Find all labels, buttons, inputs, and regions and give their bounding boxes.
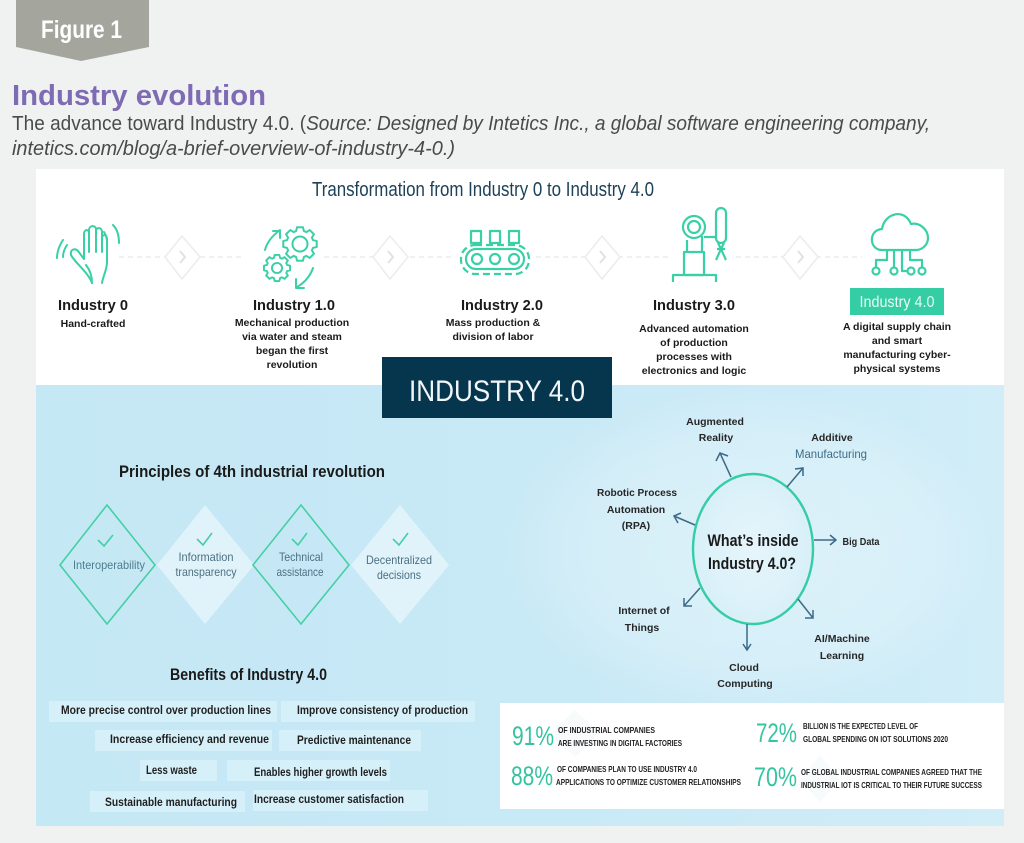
stat: 88%: APPLICATIONS TO OPTIMIZE CUSTOMER RELATIONSHIPS [556, 777, 741, 787]
figure tab [16, 0, 149, 61]
diamond: Technical assistance: assistance [276, 565, 324, 579]
banner: Industry 4.0 [382, 357, 612, 418]
diagram labels: (RPA) [622, 520, 650, 532]
timeline heading: Transformation from Industry 0 to Industry 4.0 [312, 179, 654, 201]
icon: gears [264, 227, 317, 288]
stage: Industry 2.0: Mass production & [446, 317, 541, 329]
stage: Industry 0: Hand-crafted [61, 318, 125, 330]
diamond: Information transparency: transparency [176, 565, 236, 579]
diagram labels: Things [625, 622, 659, 634]
benefits list: Less waste [146, 765, 197, 777]
stage: Industry 3.0: processes with [656, 351, 732, 363]
benefits list: Increase customer satisfaction [254, 794, 404, 806]
panel: Industry 4.0 details [36, 385, 1004, 826]
figure tab: Figure 1 [41, 16, 122, 44]
stat: 91%: OF INDUSTRIAL COMPANIES [558, 725, 655, 735]
heading: principles: Principles of 4th industrial revolution [119, 462, 385, 481]
diagram labels: Robotic Process [597, 487, 677, 499]
diamond: Interoperability [60, 505, 155, 624]
panel: transformation timeline [36, 169, 1004, 385]
benefits list: More precise control over production lines [61, 705, 271, 717]
diagram labels: Manufacturing [795, 447, 867, 461]
diagram labels: Automation [607, 504, 665, 516]
arrows [674, 453, 836, 650]
stat: 70%: 70% [754, 762, 797, 792]
stat: 91% [512, 721, 682, 751]
diamond: Information transparency: Information [178, 550, 234, 564]
stage: Industry 1.0: Industry 1.0 [253, 297, 335, 314]
caption [12, 113, 930, 160]
diagram labels: Reality [699, 432, 733, 444]
diamond: Technical assistance: Technical [279, 550, 323, 564]
stage: Industry 3.0: Industry 3.0 [653, 297, 735, 314]
diagram labels: Additive [811, 432, 853, 444]
benefits list: Enables higher growth levels [254, 767, 387, 779]
stage: Industry 3.0: electronics and logic [642, 365, 746, 377]
stage: Industry 1.0: began the first [256, 345, 329, 357]
banner: Industry 4.0: INDUSTRY 4.0 [409, 375, 585, 408]
diamond: Decentralized decisions [351, 505, 449, 624]
stat: 88% [511, 761, 741, 791]
caption: The advance toward Industry 4.0. (Source: Designed by Intetics Inc., a global software engineering company, [12, 113, 930, 135]
stat: 72%: 72% [756, 718, 797, 748]
diagram labels [597, 416, 880, 690]
stage: Industry 3.0 [639, 297, 749, 377]
stage: Industry 4.0: Industry 4.0 [860, 294, 935, 311]
benefits list: Predictive maintenance [297, 735, 411, 747]
benefits list [49, 701, 475, 812]
stage: Industry 2.0 [446, 297, 543, 343]
icon: conveyor [461, 231, 529, 274]
benefits list: Increase efficiency and revenue [110, 734, 269, 746]
stat: 72%: BILLION IS THE EXPECTED LEVEL OF [803, 721, 918, 731]
stage: Industry 2.0: Industry 2.0 [461, 297, 543, 314]
stat: 72%: GLOBAL SPENDING ON IOT SOLUTIONS 2020 [803, 734, 948, 744]
icon: hand [57, 225, 119, 283]
benefits list: Improve consistency of production [297, 705, 468, 717]
diamond: Technical assistance [253, 505, 349, 624]
stage: Industry 2.0: division of labor [452, 331, 534, 343]
diagram: what's inside Industry 4.0 [597, 416, 880, 690]
diagram labels: Cloud [729, 662, 759, 674]
timeline connectors [119, 236, 862, 279]
central circle [693, 474, 813, 624]
stage: Industry 4.0: A digital supply chain [843, 321, 951, 333]
stage: Industry 4.0 [843, 288, 951, 375]
stage: Industry 1.0: via water and steam [242, 331, 342, 343]
stat: 88%: OF COMPANIES PLAN TO USE INDUSTRY 4.0 [557, 764, 697, 774]
stat: 72% [756, 718, 948, 748]
stat: 70% [754, 762, 982, 792]
title: Industry evolution [12, 80, 266, 112]
benefits list: Sustainable manufacturing [105, 797, 237, 809]
stage: Industry 1.0: Mechanical production [235, 317, 349, 329]
diamond: Decentralized decisions: decisions [377, 568, 421, 582]
heading: benefits: Benefits of Industry 4.0 [170, 665, 327, 684]
icon: robot arm [673, 208, 726, 282]
stat: 91%: 91% [512, 721, 554, 751]
diagram labels: Big Data [842, 536, 880, 548]
caption: intetics.com/blog/a-brief-overview-of-industry-4-0.) [12, 138, 455, 160]
central circle: Industry 4.0? [708, 554, 796, 573]
stat: 91%: ARE INVESTING IN DIGITAL FACTORIES [558, 738, 682, 748]
diagram labels: Learning [820, 650, 864, 662]
stage: Industry 3.0: Advanced automation [639, 323, 749, 335]
diagram labels: Augmented [686, 416, 744, 428]
stat: 88%: 88% [511, 761, 553, 791]
stage: Industry 4.0: physical systems [854, 363, 941, 375]
diamond: Decentralized decisions: Decentralized [366, 553, 432, 567]
stage: Industry 3.0: of production [660, 337, 728, 349]
diamond: Interoperability: Interoperability [73, 558, 145, 572]
icon: cloud network [872, 214, 928, 274]
diagram labels: AI/Machine [814, 633, 870, 645]
central circle: What’s inside [708, 531, 798, 550]
diagram labels: Internet of [618, 605, 670, 617]
stage: Industry 1.0: revolution [267, 359, 317, 371]
stage: Industry 0: Industry 0 [58, 297, 128, 314]
stage: Industry 4.0: and smart [872, 335, 923, 347]
principle diamonds [60, 505, 449, 624]
diagram labels: Computing [717, 678, 773, 690]
stage: Industry 0 [58, 297, 128, 330]
panel: statistics [500, 703, 1004, 809]
diamond: Information transparency [157, 505, 254, 624]
stage: Industry 1.0 [235, 297, 349, 371]
stage: Industry 4.0: manufacturing cyber- [843, 349, 951, 361]
